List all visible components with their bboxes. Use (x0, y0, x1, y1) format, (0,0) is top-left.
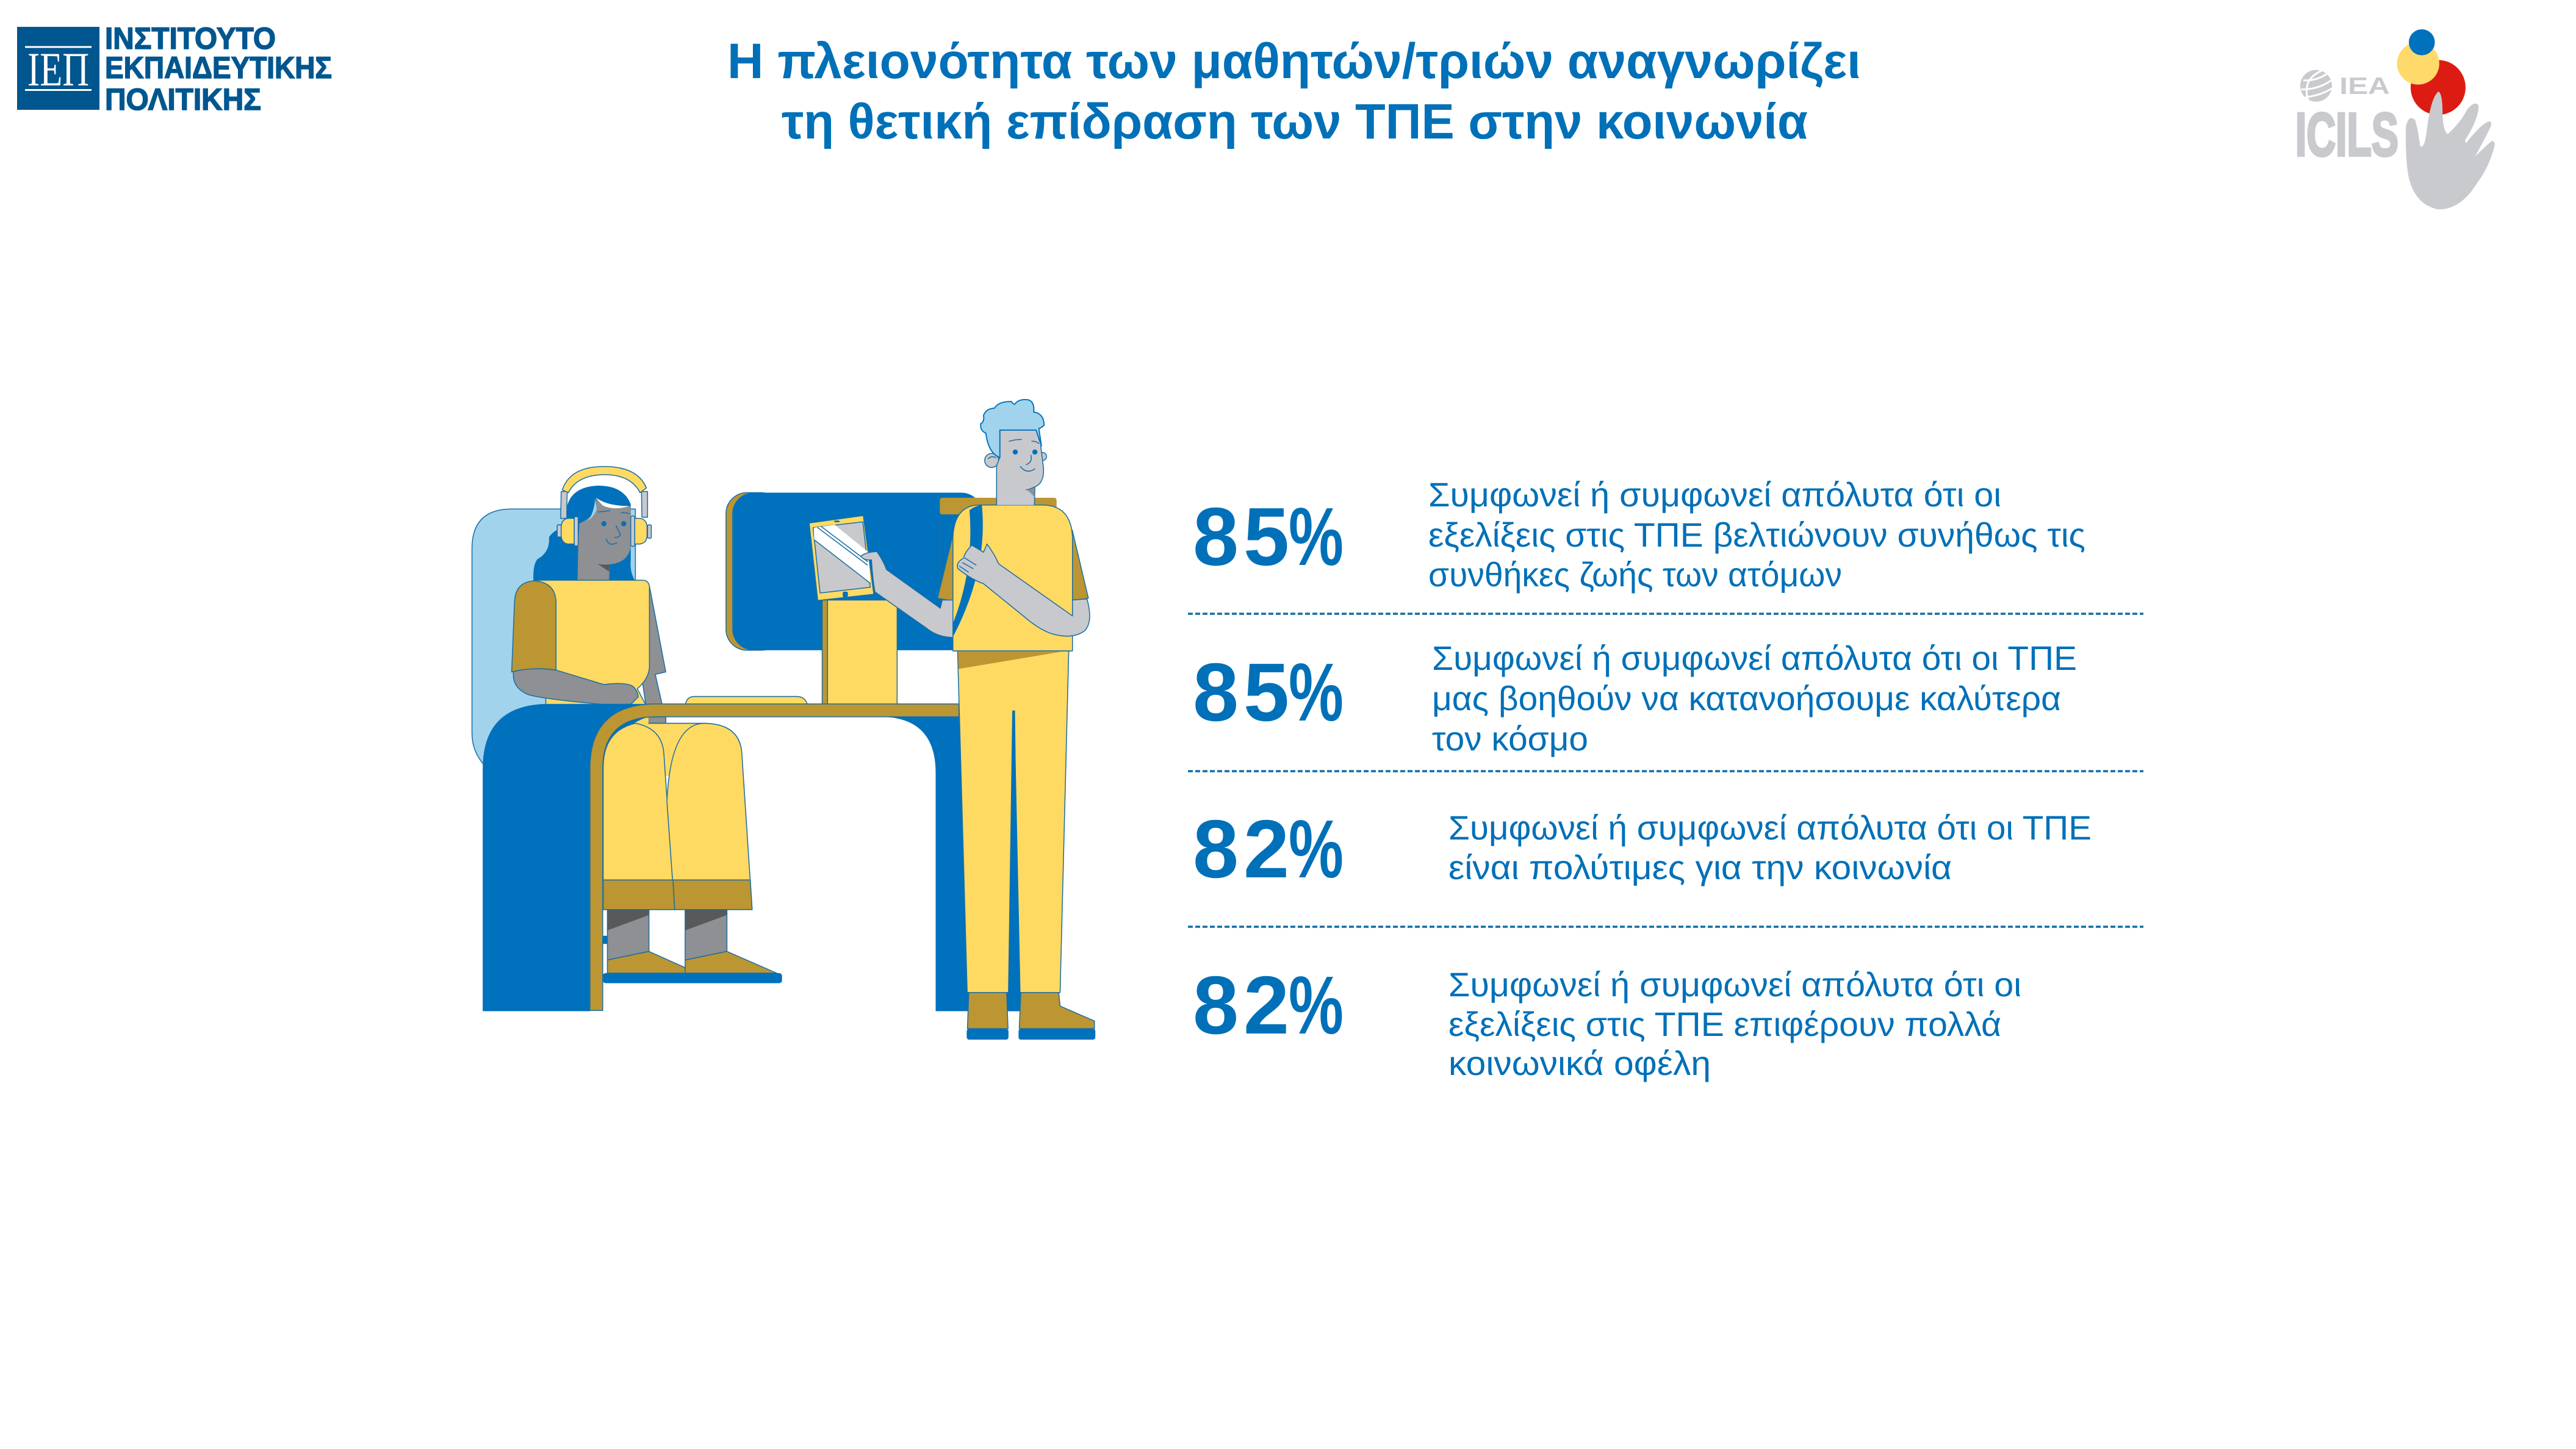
logo: Institute of Educational Policy (17, 21, 332, 117)
statement text: Συμφωνεί ή συμφωνεί απόλυτα ότι οι (1428, 475, 2001, 514)
statement text: εξελίξεις στις ΤΠΕ επιφέρουν πολλά (1448, 1005, 2001, 1043)
illustration: students with desk and tablet (472, 400, 1095, 1040)
trousers (957, 651, 1069, 1011)
icon: coloured circles (2397, 29, 2466, 115)
statement text: εξελίξεις στις ΤΠΕ βελτιώνουν συνήθως τις (1428, 516, 2085, 554)
right arm (957, 544, 1090, 636)
statement text (1428, 475, 2085, 594)
percentage 82% (1193, 959, 1344, 1051)
statement text: Συμφωνεί ή συμφωνεί απόλυτα ότι οι (1448, 965, 2021, 1004)
statistic row 1 (1193, 475, 2085, 594)
percentage 85% (1193, 491, 1344, 583)
logo wordmark: ΙΝΣΤΙΤΟΥΤΟ (105, 21, 276, 56)
torso (953, 505, 1073, 651)
statement text: τον κόσμο (1432, 719, 1588, 758)
shoes (966, 993, 1095, 1040)
statement text (1432, 639, 2077, 758)
percentage 85% (1193, 646, 1344, 738)
percentage 82%: % (1289, 959, 1344, 1051)
chair back (472, 509, 635, 766)
percentage 82%: 82 (1193, 959, 1289, 1051)
percentage 82%: 82 (1193, 803, 1289, 895)
logo wordmark (105, 21, 332, 117)
statement text: Συμφωνεί ή συμφωνεί απόλυτα ότι οι ΤΠΕ (1432, 639, 2077, 677)
desk right leg (880, 717, 1021, 1011)
statement text: μας βοηθούν να κατανοήσουμε καλύτερα (1432, 679, 2061, 717)
logo wordmark: ΕΚΠΑΙΔΕΥΤΙΚΗΣ (105, 51, 332, 85)
statement text: Συμφωνεί ή συμφωνεί απόλυτα ότι οι ΤΠΕ (1448, 808, 2092, 847)
percentage 82%: % (1289, 803, 1344, 895)
monitor (726, 492, 982, 650)
logo mark: IEP square: ΙΕΠ (27, 43, 89, 96)
IEA text: IEA (2339, 73, 2390, 99)
man (809, 400, 1095, 1040)
statement text (1448, 808, 2092, 886)
title (727, 34, 1861, 149)
statement text (1448, 965, 2021, 1082)
percentage 85%: 85 (1193, 491, 1289, 583)
strap (953, 505, 983, 637)
desk (590, 704, 959, 1010)
left arm (861, 552, 954, 638)
statement text: είναι πολύτιμες για την κοινωνία (1448, 848, 1952, 886)
monitor stand (822, 600, 897, 705)
woman: legs and shoes (603, 717, 782, 983)
statement text: κοινωνικά οφέλη (1448, 1044, 1711, 1082)
percentage 82% (1193, 803, 1344, 895)
headphones (557, 467, 651, 547)
title: Η πλειονότητα των μαθητών/τριών αναγνωρίζει (727, 34, 1861, 89)
title: τη θετική επίδραση των ΤΠΕ στην κοινωνία (782, 94, 1808, 149)
keyboard (686, 697, 807, 704)
chair seat (483, 704, 657, 1011)
logo mark: IEP square (17, 27, 99, 110)
statistic row 4 (1193, 959, 2021, 1082)
sleeves (938, 530, 1088, 601)
statement text: συνθήκες ζωής των ατόμων (1428, 555, 1842, 594)
logo: IEA ICILS (2295, 29, 2495, 209)
percentage 85%: % (1289, 646, 1344, 738)
head (980, 400, 1046, 505)
backpack (940, 498, 1057, 514)
tablet (809, 516, 874, 600)
woman: upper body (512, 467, 666, 705)
statistic row 2 (1193, 639, 2077, 758)
icon: grey hand (2406, 92, 2495, 209)
ICILS text: ICILS (2295, 101, 2398, 169)
percentage 85%: % (1289, 491, 1344, 583)
icon: IEA globe (2300, 70, 2332, 102)
percentage 85%: 85 (1193, 646, 1289, 738)
statistic row 3 (1193, 803, 2092, 895)
logo wordmark: ΠΟΛΙΤΙΚΗΣ (105, 82, 261, 117)
